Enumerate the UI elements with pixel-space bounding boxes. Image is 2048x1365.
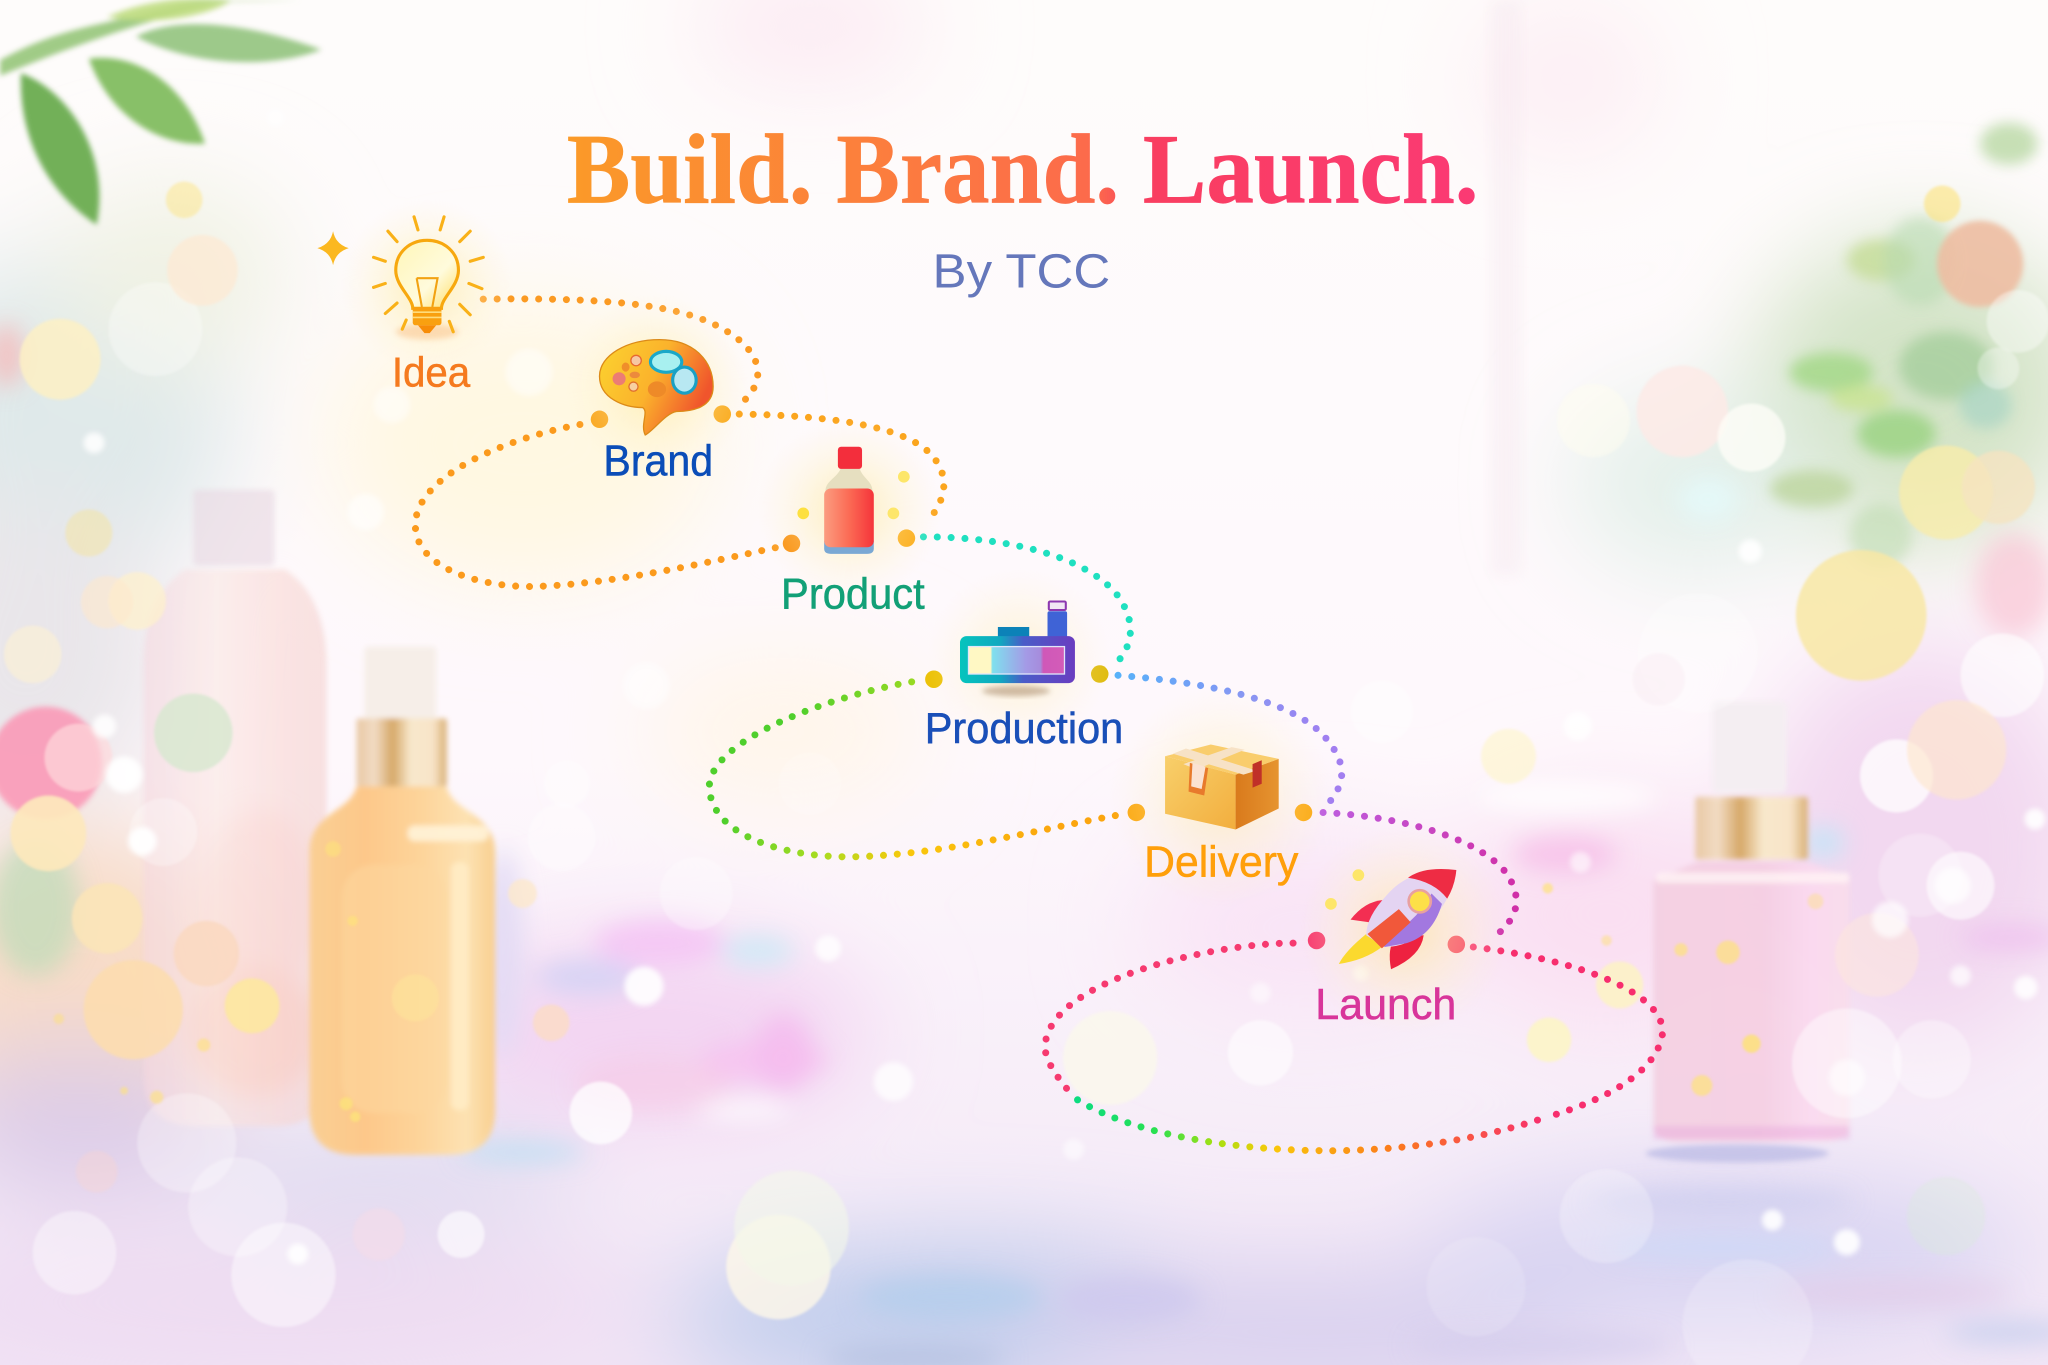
path: delivery to launch bbox=[1323, 812, 1516, 938]
icon: factory bbox=[927, 568, 1110, 751]
icon: paint palette bbox=[566, 294, 748, 477]
path: idea to brand bbox=[483, 299, 758, 404]
path: production loop to delivery bbox=[709, 682, 1118, 857]
dotted journey path bbox=[415, 299, 1663, 1151]
path: launch ellipse right bbox=[1473, 947, 1663, 1117]
label: Launch: Launch bbox=[1315, 981, 1456, 1029]
step: idea bbox=[317, 199, 513, 396]
path: brand to product arc bbox=[739, 414, 944, 520]
step: production bbox=[925, 568, 1123, 753]
step: brand bbox=[566, 294, 748, 485]
icon: bottle bbox=[758, 418, 940, 601]
bottle: amber bottle on the left bbox=[310, 647, 495, 1155]
path: product to production bbox=[923, 537, 1130, 660]
path: launch ellipse upper bbox=[1045, 943, 1293, 1091]
path: brand loop to product bbox=[415, 425, 777, 587]
path: production to delivery arc bbox=[1118, 675, 1342, 803]
foliage: blurred leaves on the right bbox=[1770, 123, 2038, 567]
bottle: tall pink bottle on the left bbox=[144, 490, 327, 1126]
label: Brand: Brand bbox=[603, 437, 713, 485]
icon: sparkle bbox=[317, 231, 349, 265]
path: launch ellipse bottom bbox=[1078, 1100, 1548, 1151]
step: launch bbox=[1300, 826, 1509, 1035]
label: Delivery: Delivery bbox=[1144, 838, 1299, 886]
label: Production: Production bbox=[925, 705, 1123, 753]
subtitle: By TCC bbox=[933, 244, 1110, 298]
title: Build. Brand. Launch. bbox=[567, 115, 1479, 224]
icon: light bulb bbox=[317, 199, 513, 371]
connector nodes bbox=[591, 405, 1465, 953]
bottle: pink bottle on the right bbox=[1646, 701, 1849, 1163]
icon: rocket bbox=[1300, 826, 1509, 1035]
icon: cardboard box bbox=[1110, 686, 1332, 908]
label: Idea: Idea bbox=[392, 349, 471, 396]
label: Product: Product bbox=[781, 571, 925, 619]
leaves in the top-left corner bbox=[0, 0, 321, 225]
step: product bbox=[758, 418, 940, 619]
step: delivery bbox=[1110, 686, 1332, 908]
